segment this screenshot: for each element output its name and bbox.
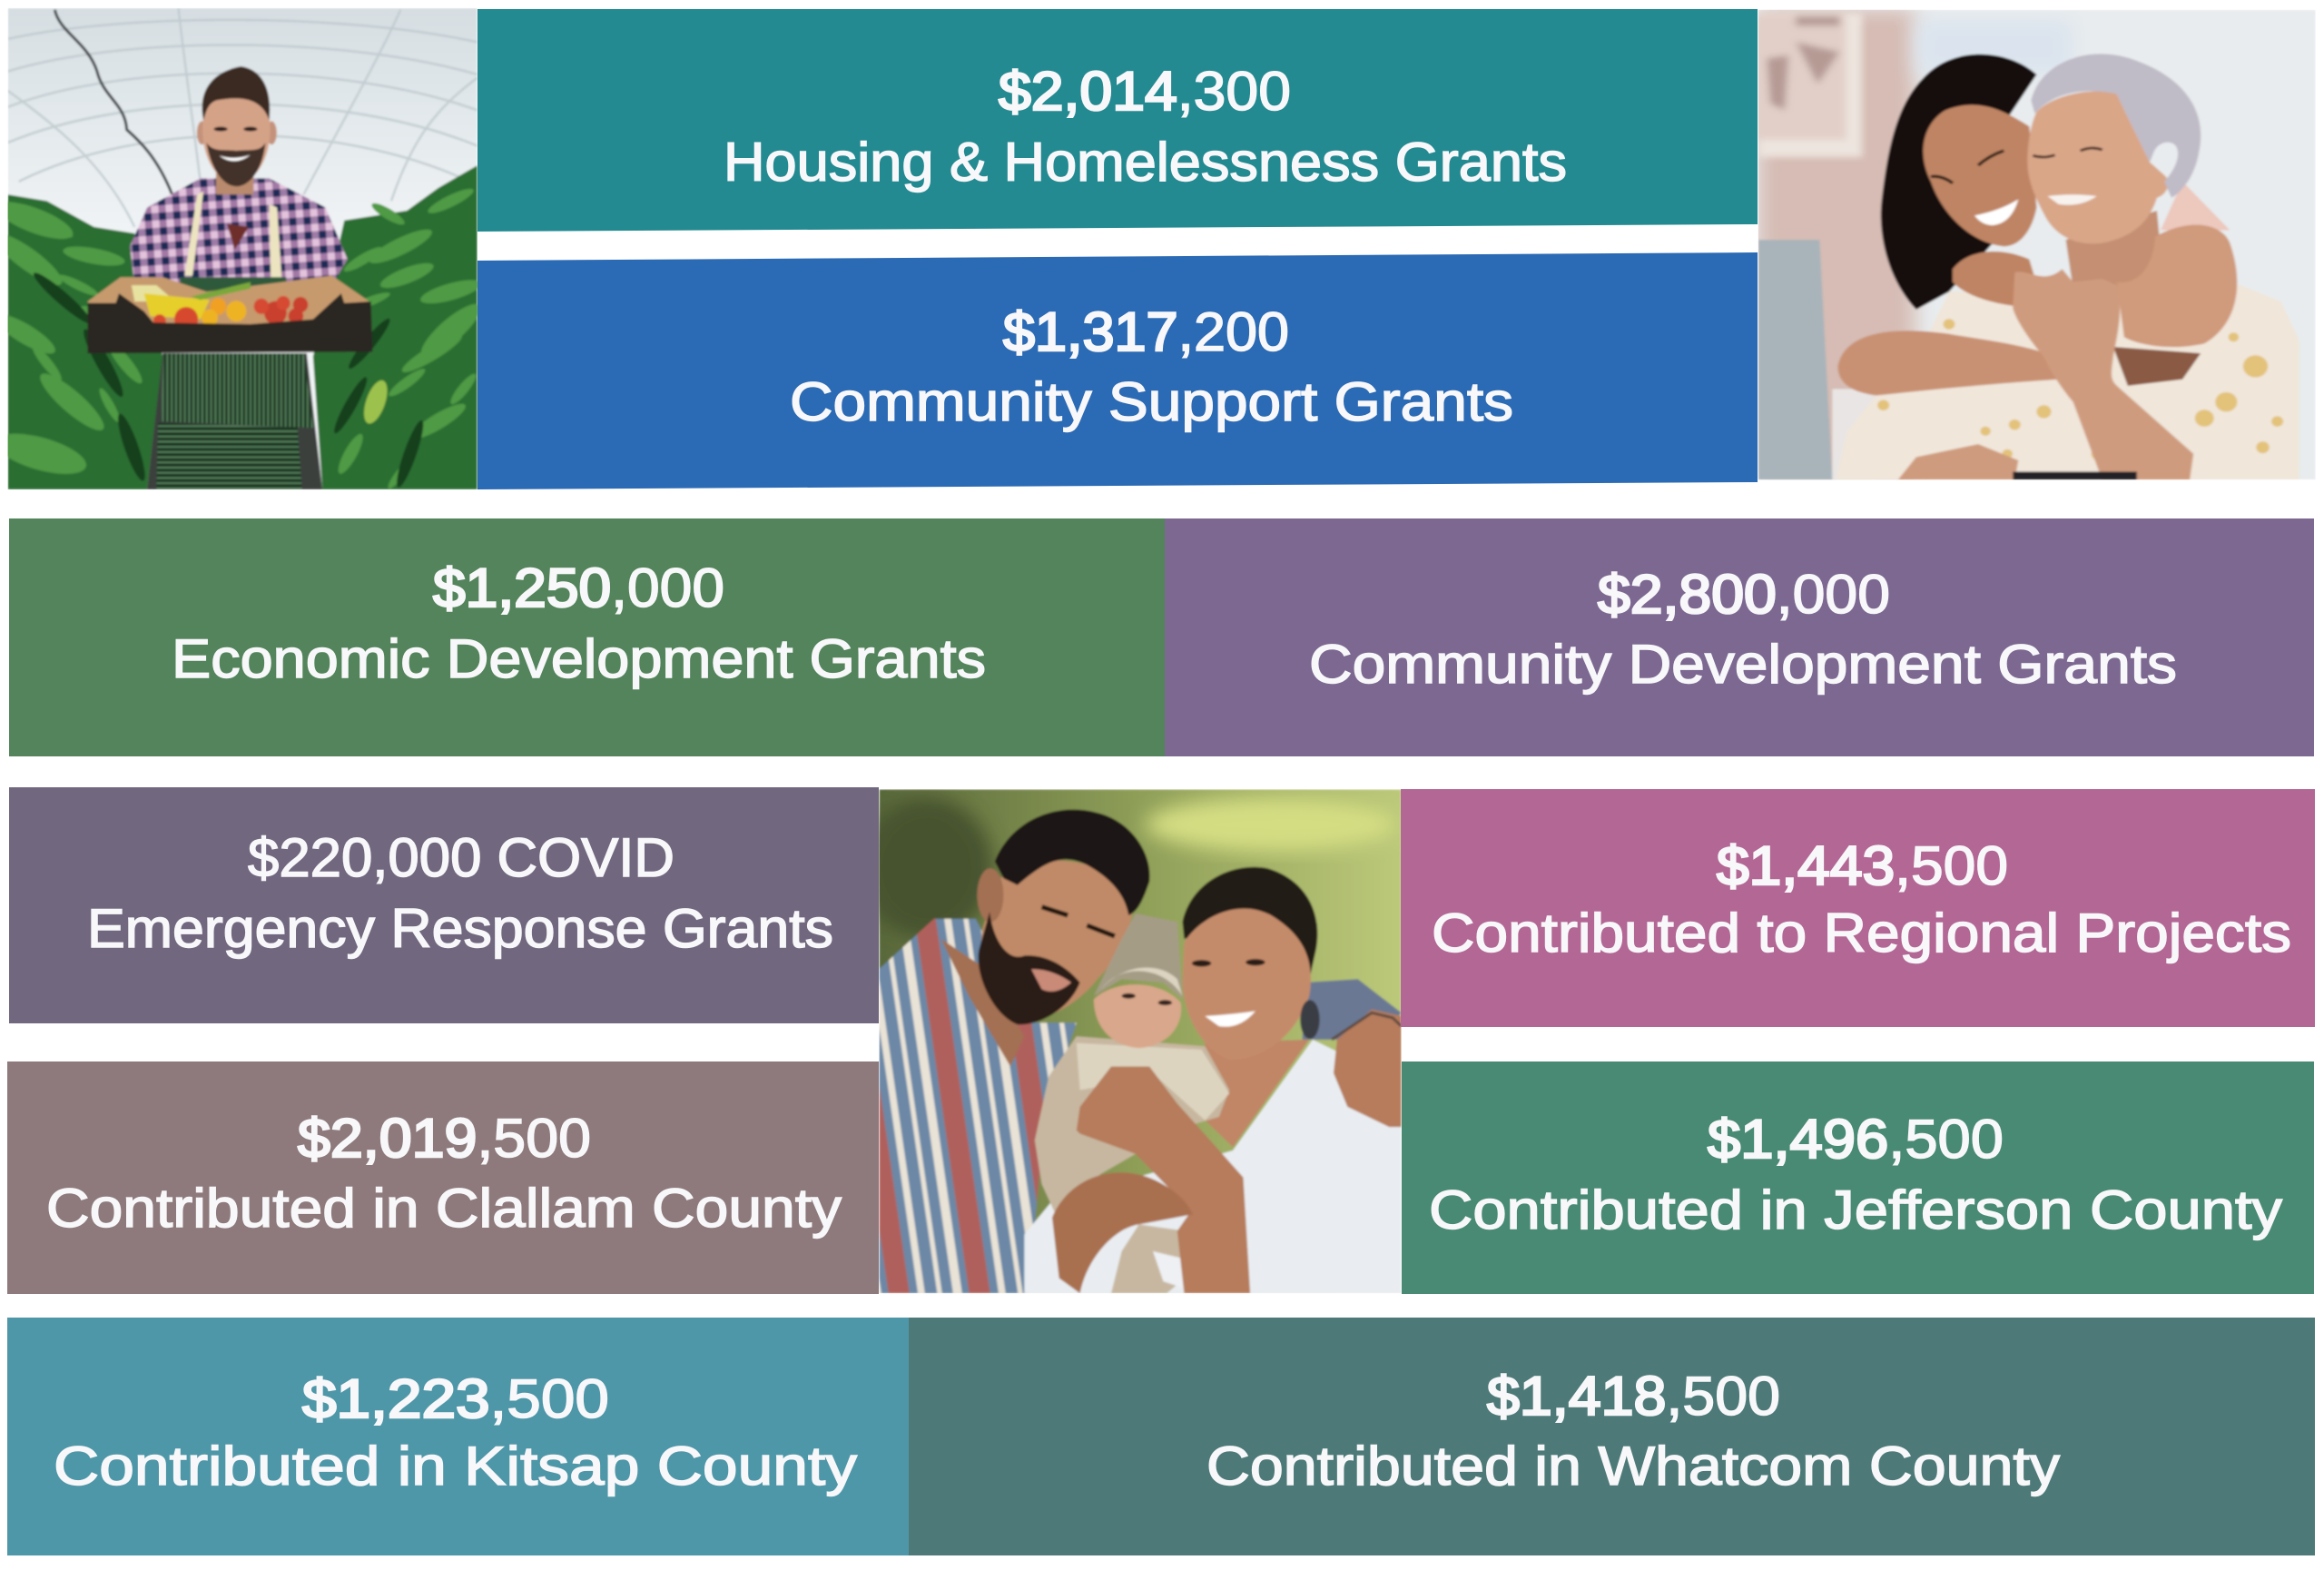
man's beard xyxy=(979,912,1080,1024)
photo: farmer holding a crate of vegetables in a greenhouse xyxy=(0,8,487,491)
label: Community Development Grants: Community Development Grants xyxy=(1309,634,2177,695)
plants xyxy=(8,194,162,489)
panel: COVID Emergency Response Grants xyxy=(9,787,879,1023)
man's neck and collar xyxy=(941,939,1024,1066)
amount: $2,019,500: $2,019,500 xyxy=(298,1108,591,1169)
amount: $1,443,500: $1,443,500 xyxy=(1717,835,2008,896)
man's face xyxy=(981,861,1136,1022)
man's hair xyxy=(995,809,1150,915)
crate xyxy=(88,275,369,324)
amount: $220,000 COVID: $220,000 COVID xyxy=(248,827,675,888)
shirt xyxy=(130,178,348,285)
older woman's hair xyxy=(2031,54,2201,198)
woman's hair and face xyxy=(1181,866,1319,973)
amount: $2,800,000: $2,800,000 xyxy=(1598,564,1890,625)
young woman's hair xyxy=(1881,54,2036,310)
label: Contributed in Jefferson County: Contributed in Jefferson County xyxy=(1429,1180,2282,1240)
label: Housing & Homelessness Grants: Housing & Homelessness Grants xyxy=(724,132,1567,193)
amount: $2,014,300: $2,014,300 xyxy=(999,61,1291,122)
label: Contributed to Regional Projects: Contributed to Regional Projects xyxy=(1432,903,2291,963)
woman's dress xyxy=(1024,1040,1402,1293)
panel: Economic Development Grants xyxy=(9,518,1166,756)
panel: Contributed in Jefferson County xyxy=(1402,1061,2314,1294)
panel: Contributed in Clallam County xyxy=(7,1061,879,1294)
man's hand on woman's shoulder xyxy=(1334,1010,1402,1127)
young woman's arms and shoulders xyxy=(2117,225,2237,347)
label: Contributed in Kitsap County: Contributed in Kitsap County xyxy=(54,1436,857,1496)
photo: young woman hugging older woman xyxy=(1758,10,2316,479)
head xyxy=(214,172,254,196)
panel: Community Development Grants xyxy=(1165,518,2314,756)
amount: $1,317,200: $1,317,200 xyxy=(1003,301,1289,362)
older woman's face xyxy=(2027,92,2168,243)
woman's arms holding baby xyxy=(1077,1066,1250,1293)
young woman's pink top xyxy=(2161,182,2230,230)
baby hat xyxy=(1094,913,1183,999)
photo: family with baby outdoors xyxy=(862,789,1402,1293)
label: Contributed in Clallam County: Contributed in Clallam County xyxy=(46,1178,842,1239)
young woman's face xyxy=(1924,105,2036,246)
label: Contributed in Whatcom County: Contributed in Whatcom County xyxy=(1206,1436,2060,1496)
clasped hands xyxy=(2013,269,2193,479)
label: Economic Development Grants: Economic Development Grants xyxy=(172,628,986,689)
blouse xyxy=(1836,285,2299,479)
label: Community Support Grants: Community Support Grants xyxy=(790,371,1513,432)
older woman's neck xyxy=(2066,211,2164,289)
panel: Contributed in Whatcom County xyxy=(909,1318,2315,1555)
baby face xyxy=(1094,984,1181,1048)
label: Emergency Response Grants: Emergency Response Grants xyxy=(87,898,833,959)
panel: Community Support Grants xyxy=(478,252,1758,489)
panel: Contributed in Kitsap County xyxy=(7,1318,910,1555)
baby swaddle xyxy=(1035,1036,1229,1214)
man's shirt xyxy=(879,919,1077,1293)
apron and legs xyxy=(147,353,322,489)
panel: Housing & Homelessness Grants xyxy=(478,9,1758,232)
panel: Contributed to Regional Projects xyxy=(1401,789,2315,1027)
amount: $1,223,500: $1,223 ,500 xyxy=(302,1368,609,1429)
amount: $1,496,500: $1,496 ,500 xyxy=(1708,1109,2004,1170)
amount: $1,418,500: $1,418,500 xyxy=(1487,1366,1780,1427)
amount: $1,250,000: $1,250,000 xyxy=(433,558,724,618)
